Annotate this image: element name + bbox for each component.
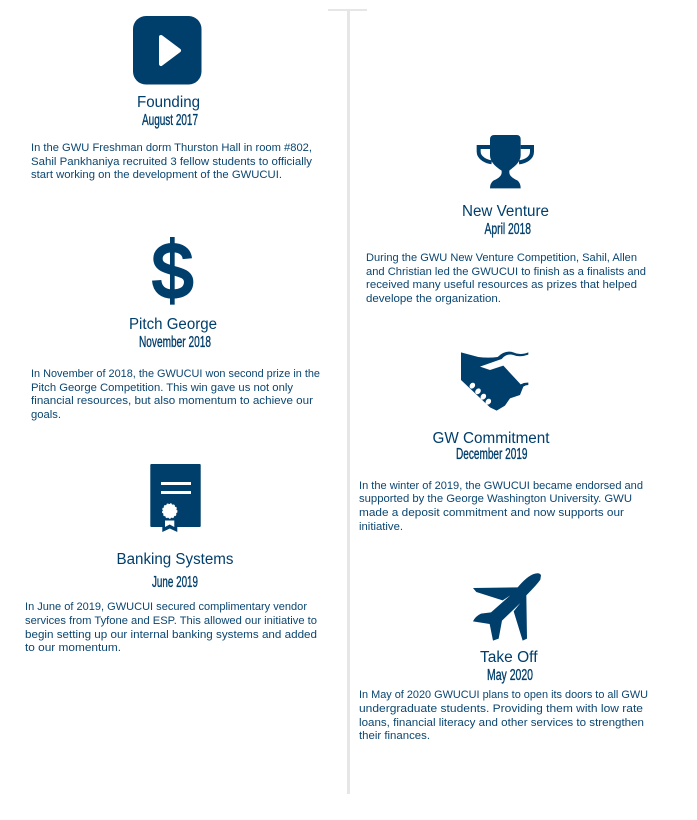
text block: Banking Systems description: In June of 2019, GWUCUI secured complimentary vendor <box>25 601 307 613</box>
panel: Banking Systems <box>25 464 317 654</box>
text block: New Venture description: develope the organization. <box>366 293 501 305</box>
text block: GW Commitment description: made a deposit commitment and now supports our <box>359 507 624 519</box>
panel: GW Commitment <box>359 352 643 533</box>
heading: Founding: Founding <box>137 94 200 111</box>
panel: Founding <box>31 16 313 181</box>
panel: Pitch George <box>31 237 320 421</box>
heading: Take Off: Take Off <box>480 649 538 666</box>
text block: Founding description: In the GWU Freshman dorm Thurston Hall in room #802, <box>31 142 312 154</box>
text block: New Venture description: and Christian led the GWUCUI to finish as a finalists and <box>366 266 646 278</box>
text block: Pitch George description: financial resources, but also momentum to achieve our <box>31 395 313 407</box>
text block: Take Off description <box>359 689 648 742</box>
date: April 2018: April 2018 <box>484 221 531 238</box>
text block: Take Off description: undergraduate students. Providing them with low rate <box>359 703 643 715</box>
text block: Banking Systems description <box>25 601 317 654</box>
icon: handshake <box>461 352 528 411</box>
text block: Founding description <box>31 142 313 181</box>
heading: New Venture: New Venture <box>462 203 549 220</box>
text block: Banking Systems description: services from Tyfone and ESP. This allowed our initiative to <box>25 615 317 627</box>
date: August 2017: August 2017 <box>142 112 198 129</box>
timeline axis <box>328 9 367 794</box>
text block: Take Off description: loans, financial literacy and other services to strengthen <box>359 717 644 729</box>
text block: Banking Systems description: to our momentum. <box>25 642 121 654</box>
text block: GW Commitment description: supported by the George Washington University. GWU <box>359 493 632 505</box>
icon: play button <box>133 16 202 84</box>
text block: GW Commitment description <box>359 480 643 533</box>
text block: GW Commitment description: initiative. <box>359 521 403 533</box>
icon: trophy <box>479 135 532 188</box>
date: May 2020: May 2020 <box>487 667 533 684</box>
heading: Banking Systems: Banking Systems <box>116 551 234 568</box>
text block: New Venture description: received many useful resources as prizes that helped <box>366 279 637 291</box>
date: December 2019: December 2019 <box>456 446 528 463</box>
text block: Pitch George description: In November of 2018, the GWUCUI won second prize in the <box>31 368 320 380</box>
icon: certificate <box>150 464 201 532</box>
text block: Founding description: start working on the development of the GWUCUI. <box>31 169 282 181</box>
text block: Founding description: Sahil Pankhaniya recruited 3 fellow students to officially <box>31 156 313 168</box>
icon: airplane <box>473 573 541 641</box>
heading: GW Commitment: GW Commitment <box>432 430 550 447</box>
text block: Pitch George description: Pitch George Competition. This win gave us not only <box>31 382 294 394</box>
text block: New Venture description <box>366 252 646 305</box>
icon: dollar sign <box>157 237 189 305</box>
text block: Pitch George description: goals. <box>31 409 61 421</box>
panel: Take Off <box>359 573 648 742</box>
text block: New Venture description: During the GWU New Venture Competition, Sahil, Allen <box>366 252 637 264</box>
date: November 2018: November 2018 <box>139 334 211 351</box>
panel: New Venture <box>366 135 646 305</box>
text block: Take Off description: In May of 2020 GWUCUI plans to open its doors to all GWU <box>359 689 648 701</box>
heading: Pitch George: Pitch George <box>129 316 217 333</box>
text block: Pitch George description <box>31 368 320 421</box>
text block: Banking Systems description: begin setting up our internal banking systems and added <box>25 629 317 641</box>
text block: Take Off description: their finances. <box>359 730 430 742</box>
date: June 2019: June 2019 <box>152 574 198 591</box>
text block: GW Commitment description: In the winter of 2019, the GWUCUI became endorsed and <box>359 480 643 492</box>
